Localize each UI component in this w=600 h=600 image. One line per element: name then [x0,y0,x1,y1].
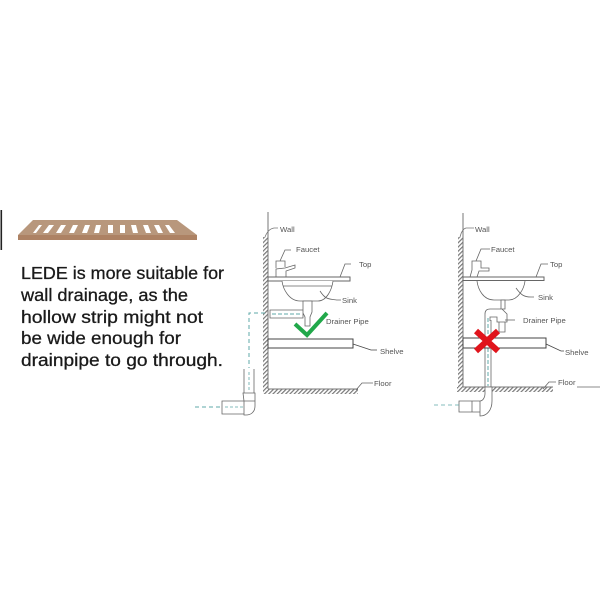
countertop: Top [359,260,371,269]
drainer pipe [485,300,566,387]
faucet: Faucet [491,245,515,254]
wall: Wall [280,225,295,234]
diagram: correct wall drainage [195,212,404,415]
drainer pipe: Drainer Pipe [523,316,566,325]
description text: LEDE is more suitable for [21,263,224,283]
faucet [276,245,320,277]
description text: hollow strip might not [21,307,203,327]
wall [263,212,295,390]
icon: slatted wood panel [18,220,197,240]
icon: green check mark [295,313,327,335]
faucet [470,245,515,277]
shelf: Shelve [380,347,404,356]
description text: wall drainage, as the [20,285,188,305]
faucet: Faucet [296,245,320,254]
countertop: Top [550,260,562,269]
countertop [463,260,562,280]
floor [263,379,392,394]
elbow pipe [222,369,255,415]
description text: drainpipe to go through. [21,350,223,370]
shelf [463,338,589,357]
sink: Sink [538,293,553,302]
diagram: blocked drainage [434,213,600,416]
countertop [268,260,371,281]
icon: red cross [476,331,498,351]
shelf [268,339,404,356]
shelf: Shelve [565,348,589,357]
drainer pipe [270,301,369,326]
sink [282,281,357,305]
drain flow path [195,313,265,407]
wall [458,213,490,387]
floor: Floor [558,378,576,387]
sink [477,281,553,302]
floor [457,378,600,392]
description text [20,263,224,370]
accent bar [0,210,2,250]
wall: Wall [475,225,490,234]
floor: Floor [374,379,392,388]
drainer pipe: Drainer Pipe [326,317,369,326]
description text: be wide enough for [21,328,181,348]
elbow pipe [434,387,492,416]
sink: Sink [342,296,357,305]
